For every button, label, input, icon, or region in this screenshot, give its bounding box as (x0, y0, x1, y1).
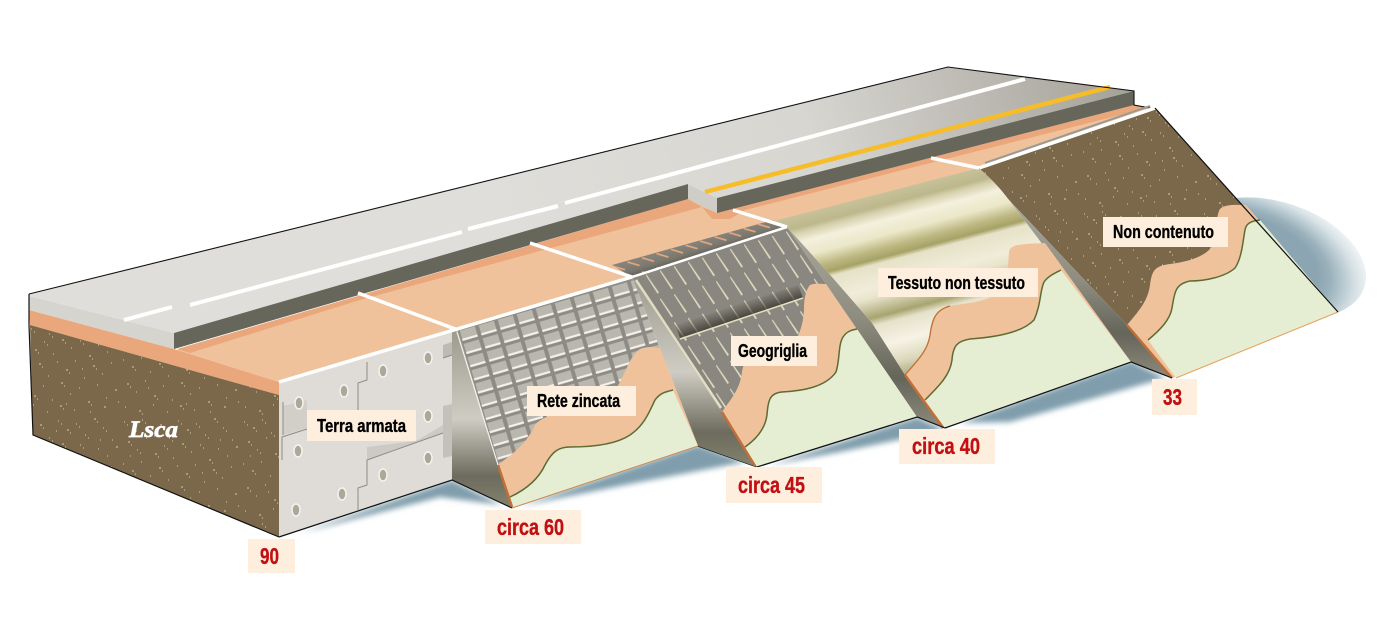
geogrid top stripes (612, 220, 785, 277)
geogrid face (632, 227, 917, 467)
shadow: ground shadow behind right end (1168, 176, 1382, 340)
side outline (29, 294, 279, 537)
wall joints (282, 355, 452, 510)
logo: Lsca (128, 417, 178, 442)
top edge line geogrid (632, 227, 787, 277)
base edge (512, 446, 698, 508)
panel: non contenuto (979, 108, 1338, 378)
green outline (925, 270, 1061, 400)
wall shading patch middle (367, 425, 443, 460)
panel: terra armata wall (279, 330, 458, 537)
cross line three left (733, 210, 787, 227)
panel: front brown side (29, 294, 279, 537)
road edge dark left (174, 184, 688, 349)
wall bolts (292, 352, 432, 516)
orange layer (498, 347, 698, 508)
road side face (29, 296, 174, 349)
value: circa 60: circa 60 (497, 514, 564, 540)
value: circa 40 (899, 429, 995, 464)
label: Geogriglia (731, 336, 817, 366)
orange layer (905, 243, 1131, 428)
road lane dashes (124, 79, 1025, 320)
base edge and outline (1176, 312, 1338, 378)
label: Rete zincata: Rete zincata (537, 391, 621, 411)
darker orange strip right (702, 105, 1153, 219)
darker orange strip (177, 199, 702, 353)
wedge: non contenuto (1009, 200, 1172, 378)
geogrid left border (636, 280, 721, 408)
green layer (745, 329, 917, 467)
cross line one (358, 293, 458, 330)
value: 33 (1152, 379, 1197, 415)
orange side layer (29, 310, 279, 395)
road platform (29, 67, 1155, 382)
mesh face (457, 277, 698, 508)
slope outline right (1155, 108, 1338, 312)
wedge: geogriglia (632, 277, 757, 467)
panel: geogriglia (612, 220, 917, 467)
green outline (510, 390, 673, 497)
value: 33: 33 (1163, 384, 1182, 410)
wall shading patch right (443, 342, 452, 358)
green outline (745, 329, 857, 447)
base line panel two (698, 417, 945, 467)
value: circa 45 (726, 467, 822, 503)
road surface (29, 67, 1134, 333)
geogrid top strip (612, 220, 785, 277)
panel: rete zincata (457, 277, 698, 508)
label: Geogriglia: Geogriglia (738, 341, 808, 361)
green outline (1148, 220, 1260, 340)
base line wall (279, 480, 512, 537)
label: Terra armata (307, 410, 416, 441)
wall shading patches (283, 400, 307, 435)
label: Tessuto non tessuto: Tessuto non tessuto (888, 273, 1025, 293)
brown soil side (30, 325, 279, 537)
orange subgrade surface (177, 105, 1155, 382)
orange outline (905, 306, 950, 375)
value: circa 60 (485, 510, 581, 544)
wedge: rete zincata (452, 330, 512, 508)
yellow centre line (705, 87, 1110, 192)
top edge line right (979, 108, 1155, 168)
geogrid fold line (680, 298, 803, 339)
value: 90 (248, 539, 295, 573)
brown soil face (979, 108, 1338, 378)
shadow: ground shadow along the base (300, 361, 1165, 533)
road edge dark right (717, 91, 1134, 213)
value: circa 40: circa 40 (912, 433, 980, 459)
grey line above top edge right (985, 106, 1150, 163)
wall shading patch lower right (443, 404, 452, 458)
orange layer (722, 284, 917, 467)
cross line two (530, 243, 632, 277)
label: Non contenuto: Non contenuto (1113, 222, 1214, 242)
panel: tessuto non tessuto (770, 168, 1131, 428)
green layer (1148, 220, 1338, 378)
label: Rete zincata (527, 386, 636, 416)
label: Non contenuto (1103, 217, 1228, 247)
cross line three (931, 158, 979, 168)
base line panel three (945, 362, 1172, 428)
wall face (279, 330, 458, 537)
wedge: tessuto (787, 227, 945, 428)
label: Tessuto non tessuto (878, 268, 1038, 297)
green layer (510, 390, 698, 508)
top edge line wall and mesh (279, 277, 632, 382)
green layer (925, 270, 1131, 428)
value: 90: 90 (260, 543, 279, 569)
road notch (688, 184, 717, 213)
geogrid fold shadow (675, 285, 803, 338)
label: Terra armata: Terra armata (317, 416, 407, 436)
orange layer (1127, 205, 1338, 378)
road outline (29, 67, 1155, 294)
fabric surface (770, 168, 1131, 428)
value: circa 45: circa 45 (738, 472, 805, 498)
